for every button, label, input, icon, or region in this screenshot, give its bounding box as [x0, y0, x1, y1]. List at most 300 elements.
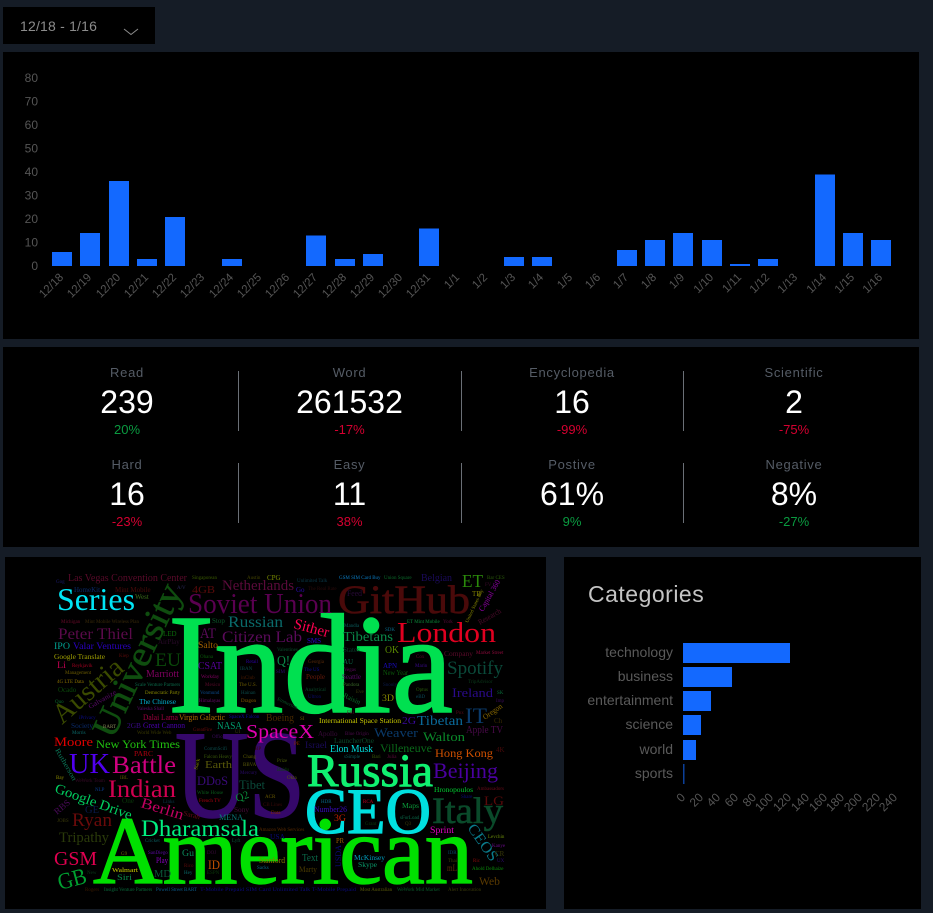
stat: Postive: Postive	[548, 457, 596, 472]
large words: Ryan	[72, 810, 112, 831]
small words: Kanye	[492, 844, 506, 849]
small words: UX	[497, 859, 505, 864]
small words: Georgia	[308, 660, 325, 665]
small words: DOJ	[207, 851, 216, 856]
small words: GreatFire	[193, 728, 213, 733]
small words: SI	[300, 717, 305, 722]
medium words: DDoS	[197, 773, 228, 788]
large words: Italy	[432, 791, 504, 832]
medium words: PARC	[134, 750, 153, 758]
small words: United States Bay	[465, 589, 485, 624]
small words: Vegas	[344, 668, 356, 673]
medium words: Number26	[314, 805, 347, 814]
stat: Scientific: 2	[785, 384, 803, 420]
large words: Soviet Union	[188, 589, 332, 620]
small words: New	[87, 871, 97, 876]
x axis labels: 0	[673, 790, 688, 805]
medium words: Ireland	[452, 685, 494, 700]
medium words: Sony	[234, 806, 250, 814]
stat: Easy: Easy	[334, 457, 365, 472]
stat: Negative: -27%	[779, 514, 810, 529]
large words: EU	[155, 650, 181, 671]
small words: TB	[472, 590, 481, 598]
panel: key statistics	[3, 347, 919, 547]
small words: Cox	[416, 655, 425, 660]
small words: Mandla	[344, 624, 360, 629]
x axis date labels: 1/16	[861, 272, 885, 296]
small words: West	[135, 593, 149, 601]
medium words: Dalai Lama	[143, 713, 178, 722]
stat: Scientific: Scientific	[764, 365, 824, 380]
x axis date labels: 1/14	[805, 271, 830, 296]
small words: UI	[235, 730, 241, 735]
small words: SMS	[307, 637, 321, 645]
stat: Easy: 38%	[336, 514, 363, 529]
medium words: CSAT	[198, 661, 222, 672]
small words: CommScifi	[204, 747, 228, 752]
medium words: IPO	[54, 641, 71, 651]
medium words: Earth	[205, 759, 233, 771]
small words: Apollo	[318, 730, 338, 738]
medium words: ID	[208, 857, 220, 872]
large words: ET	[462, 571, 483, 591]
panel: daily reads bar chart	[3, 52, 919, 339]
small words: CR	[495, 850, 505, 858]
y axis labels: 60	[25, 118, 38, 132]
x axis date labels: 1/12	[748, 272, 772, 296]
small words: Morris	[72, 731, 86, 736]
small words: SanDiego	[148, 851, 168, 856]
small words: CB Lines	[263, 803, 282, 808]
medium words: Israel	[305, 740, 328, 750]
medium words: APN	[383, 662, 397, 670]
small words: Kiep	[119, 654, 129, 659]
medium words: Tripathy	[59, 830, 109, 846]
stat: Read: Read	[110, 365, 144, 380]
large words: Battle	[112, 752, 176, 779]
medium words: Marty	[299, 865, 317, 874]
large words: India	[168, 585, 453, 743]
medium words: Q2	[234, 789, 251, 805]
x axis labels	[673, 790, 900, 814]
x axis date labels: 12/23	[178, 272, 207, 300]
stat: Postive: 9%	[563, 514, 582, 529]
x axis date labels: 1/7	[611, 272, 631, 291]
small words: White House	[197, 791, 224, 796]
small words: Emmerson	[276, 697, 298, 711]
x axis date labels: 12/18	[37, 272, 66, 300]
y axis labels: 80	[25, 71, 38, 85]
small words: Prize	[277, 759, 288, 764]
x axis date labels: 1/9	[667, 272, 687, 291]
small words: Vonmund	[200, 691, 220, 696]
small words: Baidu	[277, 768, 289, 773]
small words: Marin	[415, 664, 428, 669]
stat: Hard: Hard	[112, 457, 142, 472]
medium words: AT	[200, 626, 216, 642]
small words: York	[443, 620, 453, 625]
small words: Rogers	[85, 888, 99, 893]
medium words: OK	[385, 645, 400, 656]
large words: SpaceX	[246, 721, 315, 743]
stat: Easy	[333, 457, 366, 529]
horizontal bars	[683, 643, 790, 784]
small words: Analytical	[305, 688, 326, 693]
x axis labels: 80	[740, 790, 759, 810]
x axis date labels: 1/15	[833, 272, 857, 296]
large words: American	[93, 797, 473, 904]
large words: GitHub	[338, 577, 470, 622]
medium words: Q!	[277, 654, 290, 669]
stat: Negative: 8%	[771, 476, 817, 512]
small words: Insight Venture Partners	[104, 888, 152, 893]
medium words: USA	[270, 833, 285, 841]
small words: Ohana	[200, 655, 214, 660]
medium words: Sprint	[430, 825, 455, 835]
medium words: Great Cannon	[143, 721, 185, 730]
category labels: business	[618, 668, 673, 684]
small words: Cricket	[145, 839, 160, 844]
stat: Word: 261532	[296, 384, 403, 420]
medium words: Google Translate	[54, 653, 105, 661]
small words: PE	[294, 742, 300, 747]
large words: US	[175, 707, 305, 845]
x axis date labels: 12/22	[150, 272, 179, 300]
x axis labels: 100	[752, 790, 776, 814]
x axis labels: 20	[687, 790, 706, 810]
small words: Fill	[347, 711, 355, 716]
small words: Pandora	[343, 683, 360, 688]
stat: Hard	[109, 457, 145, 529]
small words: Falcon Heavy	[204, 755, 232, 760]
medium words: Capital 360	[477, 578, 502, 613]
y axis labels: 50	[25, 142, 38, 156]
medium words: PR	[336, 837, 344, 845]
small words: Q3	[405, 822, 412, 827]
small words: SpaceX Falcon	[229, 715, 260, 720]
large words: GB	[55, 863, 89, 895]
small words: Quo	[55, 700, 64, 705]
medium words: 3G	[334, 813, 347, 823]
stat: Postive	[540, 457, 604, 529]
small words: Bari	[372, 755, 381, 760]
small words: Data	[271, 811, 281, 816]
small words: Ahold Delhaize	[472, 867, 504, 872]
small words: Mint Mobile Wireless Plan	[85, 620, 140, 625]
small words: Union Square	[384, 576, 412, 581]
small words: Bar CES	[487, 576, 505, 581]
medium words: RBS	[52, 797, 72, 817]
small words: Stop	[212, 617, 225, 625]
x axis labels: 160	[806, 790, 830, 814]
small words: Workday	[201, 675, 220, 680]
stat: Hard: -23%	[112, 514, 143, 529]
category labels: science	[626, 716, 673, 732]
medium words: Elon Musk	[330, 744, 373, 755]
medium words: One	[122, 797, 134, 805]
x axis date labels: 12/26	[263, 272, 292, 300]
small words: NLP	[95, 788, 105, 793]
small words: Imp	[496, 699, 505, 704]
small words: Sacks	[257, 866, 269, 871]
small words: Levchin	[488, 835, 505, 840]
x axis date labels: 12/24	[207, 271, 237, 300]
small words: The US	[304, 668, 320, 673]
x axis date labels: 12/20	[94, 272, 123, 300]
medium words: USDA	[334, 845, 343, 867]
large words: UK	[69, 748, 110, 780]
bars	[52, 174, 891, 266]
y axis labels: 30	[25, 188, 38, 202]
icon: chevron down	[124, 29, 138, 34]
small words: SDK	[385, 628, 395, 633]
small words: Bay	[56, 776, 65, 781]
medium words: Play	[156, 856, 168, 865]
small words: ACR	[265, 795, 276, 800]
small words: 4K	[496, 746, 505, 754]
stat: Negative: Negative	[766, 457, 822, 472]
small words: SIM	[276, 670, 285, 675]
small words: IBAN	[240, 667, 253, 672]
heading: Categories: Categories	[588, 581, 704, 607]
small words: Ambassadors	[477, 787, 504, 792]
medium words: Walton	[423, 729, 466, 744]
x axis labels: 220	[859, 790, 883, 814]
small words: Reykjavik	[72, 664, 93, 669]
small words: GSM SIM Card Buy	[339, 576, 381, 581]
small words: iPrivacy	[79, 716, 96, 721]
large words: Russia	[307, 745, 433, 797]
small words: Singaporean	[192, 576, 217, 581]
small words: HomeKit	[74, 586, 100, 594]
medium words: The Chinese	[139, 698, 176, 706]
small words: Mexico	[205, 683, 221, 688]
small words: French TV	[199, 799, 221, 804]
medium words: LG	[484, 793, 504, 808]
small words: BART	[103, 725, 116, 730]
medium words: Sarah	[182, 809, 201, 821]
small words: Amazon Web Services	[259, 828, 304, 833]
small words: G9	[121, 852, 128, 857]
x axis date labels: 12/28	[320, 272, 349, 300]
small words: Go	[296, 586, 305, 594]
small words: TripAdvisor	[468, 680, 493, 685]
small words: Snooly	[383, 683, 398, 688]
small words: Office	[212, 735, 225, 740]
medium words: Society	[71, 722, 94, 730]
medium words: Las Vegas Convention Center	[68, 573, 187, 584]
small words: The Real Rate	[308, 587, 337, 592]
small words: Retail	[246, 660, 259, 665]
category labels: technology	[605, 644, 673, 660]
medium words: Gu	[182, 848, 195, 858]
small words: States	[343, 646, 360, 654]
small words: Democratic Party	[145, 691, 181, 696]
x axis labels: 60	[722, 790, 741, 810]
small words: sSimple	[344, 755, 361, 760]
small words: Powell Street BART	[156, 888, 197, 893]
y axis labels: 0	[31, 259, 38, 273]
x axis date labels: 1/3	[498, 272, 518, 291]
medium words: Netherlands	[222, 578, 294, 594]
small words: Mint Mobile	[115, 586, 151, 594]
x axis date labels: 1/1	[442, 272, 462, 291]
medium words: Marriott	[146, 669, 179, 680]
small words: Lyft	[232, 839, 241, 844]
medium words: Seattle	[342, 673, 361, 681]
large words: Spotify	[447, 658, 503, 679]
medium words: International Space Station	[319, 716, 401, 725]
medium words: Hong Kong	[435, 746, 493, 760]
small words: Scale Venture Partners	[135, 683, 180, 688]
x axis date labels: 1/5	[555, 272, 575, 291]
medium words: Web	[479, 874, 500, 888]
medium words: Research	[476, 606, 503, 627]
x axis date labels: 12/19	[65, 272, 94, 300]
small words: AU	[343, 658, 353, 666]
medium words: Weaver	[374, 725, 419, 740]
x axis labels: 120	[770, 790, 794, 814]
small words: Ultron	[308, 695, 322, 700]
x axis date labels: 1/13	[776, 272, 800, 296]
x axis date labels: 1/6	[583, 272, 603, 291]
large words: Dharamsala	[141, 816, 259, 841]
category labels: entertainment	[587, 692, 673, 708]
small words: Hey	[184, 871, 193, 876]
small words: Ric	[473, 859, 481, 864]
stat: Encyclopedia: Encyclopedia	[529, 365, 615, 380]
stat: Read: 20%	[114, 422, 140, 437]
medium words: Skype	[358, 861, 377, 869]
small words: Valeska Shall	[137, 707, 165, 712]
stat: Word: Word	[333, 365, 366, 380]
medium words: People	[306, 673, 325, 681]
medium words: Peter Thiel	[58, 626, 133, 643]
stat: Easy: 11	[333, 476, 366, 512]
small words: T-Mobile Prepaid SIM Card Unlimited Talk T-Mobile Prepaid	[200, 888, 357, 893]
x axis labels: 180	[823, 790, 847, 814]
medium words: Sither	[292, 616, 331, 641]
large words: GSM	[54, 848, 97, 870]
stat: Negative	[766, 457, 822, 529]
medium words: 4GB	[192, 584, 215, 596]
small words: Mercury	[240, 771, 258, 776]
small words: WeWork Mid Market	[397, 888, 440, 893]
medium words: Li	[57, 660, 67, 670]
small words: HDR	[321, 800, 332, 805]
medium words	[52, 573, 504, 888]
medium words: 2GB	[127, 722, 141, 730]
large words: Series	[57, 581, 135, 617]
medium words: Walmart	[112, 868, 138, 874]
medium words: Belgian	[421, 573, 452, 584]
medium words: Rutherson	[53, 747, 79, 783]
small words: Valentines	[277, 648, 298, 653]
small words: FV	[485, 583, 492, 588]
small words: sForLoad	[400, 816, 420, 821]
small words: A/V	[177, 586, 186, 591]
small words: Pox	[456, 711, 464, 716]
small words: Gog	[56, 580, 65, 585]
medium words: Tibetan	[417, 714, 463, 729]
medium words: GE	[85, 804, 99, 816]
stat: Read: 239	[100, 384, 154, 420]
stat: Word	[296, 365, 403, 437]
stat: Encyclopedia	[529, 365, 615, 437]
small words: Chang	[243, 755, 257, 760]
large words: University	[84, 577, 190, 743]
x axis date labels: 1/4	[526, 271, 547, 291]
medium words: Tibetans	[343, 630, 393, 645]
large words: Austria	[46, 651, 130, 730]
category labels: world	[639, 741, 673, 757]
medium words: 3D	[382, 693, 395, 703]
medium words: Hronopoulos	[434, 786, 473, 794]
medium words: Moore	[54, 734, 93, 749]
x axis date labels: 12/29	[348, 272, 377, 300]
small words: The U.S.	[239, 683, 257, 688]
y axis labels	[25, 71, 38, 273]
x axis date labels: 1/2	[470, 272, 490, 291]
small words: Raisin	[342, 692, 362, 707]
small words: Austin	[247, 576, 261, 581]
medium words: Google Drive	[53, 782, 134, 823]
small words: Okta	[287, 776, 298, 781]
x axis date labels: 12/27	[291, 272, 320, 300]
small words: Dragon	[241, 699, 256, 704]
small words: Unlimited Talk	[297, 579, 328, 584]
small words: AirPlay	[158, 638, 180, 646]
medium words: New York Times	[96, 737, 180, 751]
small words: eBD	[416, 695, 426, 700]
stat: Word: -17%	[334, 422, 365, 437]
medium words: New Year	[383, 669, 409, 677]
small words: inClub	[241, 676, 255, 681]
small words: Grant	[365, 822, 377, 827]
small words: Blue Origin	[345, 732, 369, 737]
x axis labels: 240	[876, 790, 900, 814]
panel: categories	[564, 557, 921, 909]
medium words: Valar Ventures	[73, 641, 132, 651]
x axis date labels: 1/11	[720, 272, 744, 295]
x axis labels: 140	[788, 790, 812, 814]
small words: WeWork Team	[75, 779, 105, 784]
stat: Hard: 16	[109, 476, 145, 512]
medium words: Salto	[198, 640, 219, 650]
medium words: Siri	[117, 873, 133, 882]
small words: 4G LTE Data	[57, 680, 85, 685]
medium words: 2G	[402, 716, 416, 727]
medium words: Boeing	[266, 713, 294, 724]
medium words: MENA	[219, 813, 243, 822]
x axis labels: 200	[841, 790, 865, 814]
small words: Hainan	[241, 691, 256, 696]
small words: Optus	[416, 688, 428, 693]
stat: Postive: 61%	[540, 476, 604, 512]
large words	[46, 571, 504, 904]
medium words: Virgin Galactic	[179, 713, 225, 722]
small words: Share	[461, 795, 473, 800]
medium words: Feed	[347, 589, 362, 598]
small words: ET Mint Mobile	[407, 620, 440, 625]
stat: Encyclopedia: -99%	[557, 422, 588, 437]
medium words: CEOS	[464, 821, 501, 865]
x axis date labels: 12/31	[404, 272, 433, 300]
medium words: Stanford	[259, 856, 285, 865]
y axis labels: 40	[25, 165, 38, 179]
x axis date labels: 12/25	[235, 272, 264, 300]
category labels: sports	[635, 765, 673, 781]
